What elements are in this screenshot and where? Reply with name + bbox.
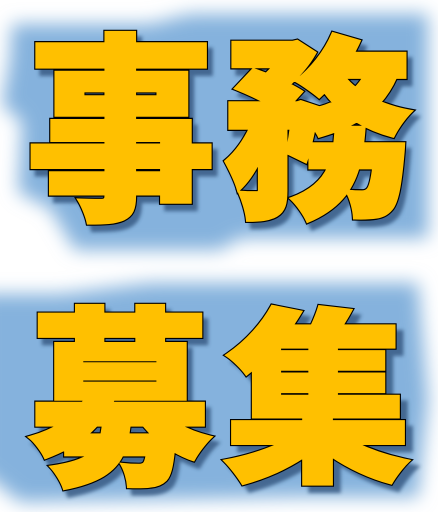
heading line 1: 事務: 事 bbox=[26, 24, 216, 246]
drop shadow of the headline: 募 bbox=[33, 302, 217, 512]
heading line 2: 募集 bbox=[28, 296, 411, 510]
heading line 2: 募集: 募 bbox=[28, 296, 212, 510]
heading line 1: 事務: 事 bbox=[26, 24, 216, 246]
drop shadow of the headline: 事 bbox=[31, 30, 221, 253]
heading line 2: 募集: 募 bbox=[28, 296, 212, 510]
drop shadow of the headline: 集 bbox=[232, 304, 418, 512]
heading line 2: 募集: 集 bbox=[225, 298, 411, 506]
drop shadow of the headline: 務 bbox=[228, 30, 418, 250]
heading line 2: 募集: 集 bbox=[225, 298, 411, 506]
heading line 1: 事務 bbox=[26, 24, 413, 246]
heading line 1: 事務: 務 bbox=[223, 24, 413, 244]
heading line 1: 事務: 務 bbox=[223, 24, 413, 244]
